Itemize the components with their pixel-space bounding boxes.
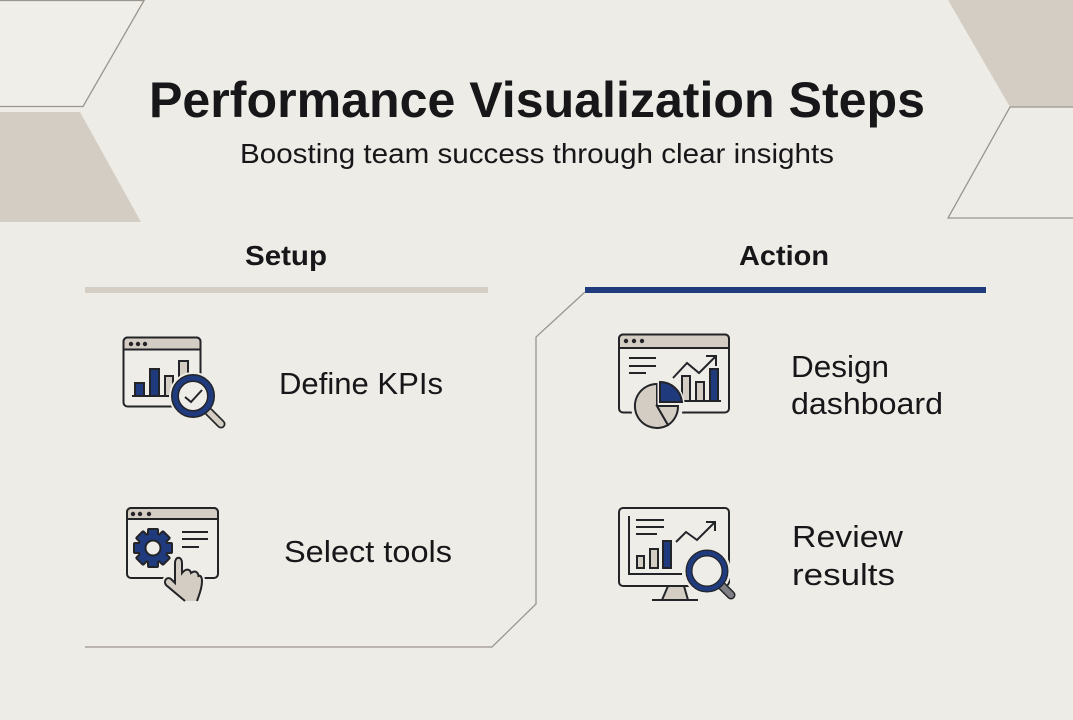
label: design dashboard [791, 349, 943, 421]
background shapes: top left [0, 0, 144, 222]
label: review results: results [792, 557, 895, 592]
label: design dashboard: dashboard [791, 386, 943, 421]
icon: dashboard with magnifier and check [124, 338, 221, 424]
panel: action [585, 240, 986, 600]
panel: setup [85, 240, 488, 601]
setup divider bar [85, 287, 488, 293]
label: review results: Review [792, 519, 904, 554]
label: select tools: Select tools [284, 534, 452, 569]
label: review results [792, 519, 904, 592]
title: Performance Visualization Steps [149, 72, 925, 128]
connector line between panels [85, 292, 585, 647]
heading: setup: Setup [245, 240, 327, 271]
subtitle: Boosting team success through clear insights [240, 138, 834, 169]
label: design dashboard: Design [791, 349, 889, 384]
icon: settings window with gear and hand [127, 508, 218, 601]
background shapes: top right [948, 0, 1073, 218]
label: define KPIs: Define KPIs [279, 366, 443, 401]
action divider bar [585, 287, 986, 293]
icon: dashboard with pie and bars [619, 334, 729, 432]
icon: monitor with chart and magnifier [619, 508, 731, 600]
heading: action: Action [739, 240, 829, 271]
